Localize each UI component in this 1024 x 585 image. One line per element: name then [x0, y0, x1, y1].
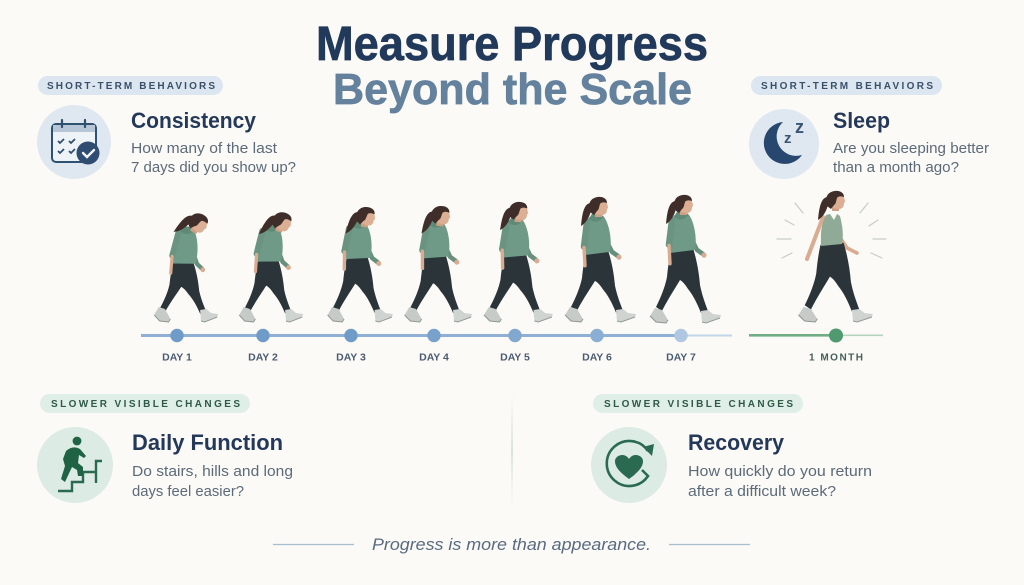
- text: daily function question: days feel easier?: [132, 483, 244, 500]
- heading: recovery: Recovery: [688, 430, 785, 455]
- icon: moon with z letters: [749, 109, 819, 179]
- timeline: days 1 to 7: DAY 6: [582, 352, 612, 364]
- timeline: days 1 to 7: DAY 4: [419, 352, 449, 364]
- text: consistency question: [131, 140, 296, 176]
- icon: person climbing stairs: [37, 427, 113, 503]
- tag: slower visible changes right: SLOWER VISIBLE CHANGES: [604, 399, 793, 410]
- text: recovery question: How quickly do you return: [688, 463, 872, 480]
- text: recovery question: [688, 463, 872, 500]
- tag: short-term behaviors left: SHORT-TERM BEHAVIORS: [47, 81, 215, 92]
- figure: day 5: [484, 201, 553, 322]
- text: sleep question: than a month ago?: [833, 159, 959, 176]
- text: daily function question: Do stairs, hills and long: [132, 463, 293, 480]
- text: sleep question: [833, 140, 989, 176]
- text: consistency question: How many of the last: [131, 140, 278, 157]
- tag: slower visible changes left: [40, 394, 250, 413]
- timeline: days 1 to 7: DAY 5: [500, 352, 530, 364]
- tag: short-term behaviors right: [751, 76, 942, 95]
- tag: short-term behaviors left: [38, 76, 223, 95]
- tag: slower visible changes right: [593, 394, 803, 413]
- figure: day 4: [405, 204, 472, 322]
- timeline: days 1 to 7: DAY 3: [336, 352, 366, 364]
- figure: day 1: [154, 206, 218, 322]
- radiating lines: [777, 203, 886, 258]
- timeline: days 1 to 7: [141, 329, 732, 364]
- text: daily function question: [132, 463, 293, 500]
- timeline: 1 month: 1 MONTH: [809, 352, 863, 364]
- text: consistency question: 7 days did you show up?: [131, 159, 296, 176]
- tag: short-term behaviors right: SHORT-TERM BEHAVIORS: [761, 81, 933, 92]
- figure: day 6: [565, 197, 636, 322]
- timeline: days 1 to 7: DAY 7: [666, 352, 696, 364]
- figure: day 7: [650, 195, 721, 323]
- icon: calendar with check: [37, 105, 111, 179]
- heading: sleep: Sleep: [833, 108, 890, 133]
- title: Beyond the Scale: [333, 65, 692, 114]
- icon: moon with z letters: z: [784, 130, 792, 147]
- panel: sleep: [749, 76, 989, 179]
- icon: heart in circular arrow: [591, 427, 667, 503]
- walking woman in tank top: [798, 191, 873, 322]
- title: [316, 18, 708, 114]
- text: recovery question: after a difficult week?: [688, 483, 836, 500]
- timeline: days 1 to 7: DAY 2: [248, 352, 278, 364]
- panel: consistency: [37, 76, 296, 179]
- figure: day 2: [239, 207, 303, 322]
- heading: consistency: Consistency: [131, 108, 257, 133]
- heading: daily function: Daily Function: [132, 430, 283, 455]
- figure: day 3: [328, 205, 393, 322]
- icon: moon with z letters: z: [795, 117, 804, 137]
- panel: recovery: [591, 394, 872, 503]
- timeline: days 1 to 7: DAY 1: [162, 352, 192, 364]
- timeline: 1 month: [749, 328, 883, 364]
- panel: daily function: [37, 394, 293, 503]
- tag: slower visible changes left: SLOWER VISIBLE CHANGES: [51, 399, 240, 410]
- title: Measure Progress: [316, 18, 708, 71]
- text: sleep question: Are you sleeping better: [833, 140, 989, 157]
- figure: 1 month upright with radiating lines: [777, 191, 886, 322]
- footer tagline: Progress is more than appearance.: [372, 535, 651, 554]
